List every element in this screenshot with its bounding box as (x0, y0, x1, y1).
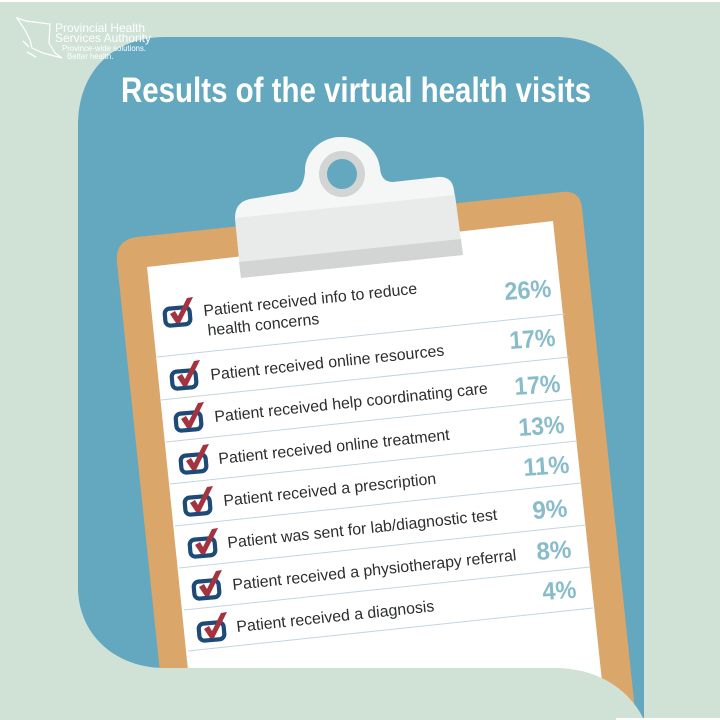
row dividers (157, 314, 593, 651)
row 1: info to reduce health concerns (164, 275, 552, 340)
row 8: diagnosis (198, 576, 577, 641)
label: Patient received a physiotherapy referral (232, 547, 517, 594)
label: Patient was sent for lab/diagnostic test (227, 507, 499, 552)
label: health concerns (207, 311, 320, 340)
value: 17% (508, 324, 556, 355)
value: 26% (503, 275, 552, 306)
icon: checkbox (171, 360, 200, 389)
label: Patient received a prescription (223, 471, 437, 510)
value: 13% (517, 411, 565, 442)
label: Patient received online resources (210, 343, 445, 384)
label: Patient received help coordinating care (214, 380, 489, 426)
logo: Provincial Health Services Authority: Better health. (67, 52, 113, 61)
icon: checkbox (193, 570, 222, 599)
value: 11% (522, 451, 570, 482)
icon: checkbox (189, 528, 218, 557)
logo: Provincial Health Services Authority: Provincial Health (55, 21, 145, 35)
row 6: lab/diagnostic test (189, 495, 568, 557)
icon: checkbox (175, 402, 204, 431)
value: 17% (513, 370, 561, 401)
bottom curved green overlay (0, 590, 644, 720)
blue rounded panel (78, 37, 644, 720)
icon: checkbox (198, 612, 227, 641)
logo: Provincial Health Services Authority (17, 18, 151, 61)
value: 8% (535, 536, 572, 566)
row 4: online treatment (180, 411, 565, 473)
paper sheet (147, 221, 604, 700)
value: 4% (541, 576, 577, 606)
icon: checkbox (164, 297, 193, 326)
label (203, 281, 420, 340)
row 3: help coordinating care (175, 370, 561, 431)
value: 9% (531, 495, 568, 525)
icon: checkbox (184, 486, 213, 515)
label: Patient received online treatment (218, 427, 451, 468)
clipboard clip (235, 137, 463, 278)
title: Results of the virtual health visits (121, 71, 591, 110)
row 5: prescription (184, 451, 570, 515)
logo: Provincial Health Services Authority: Province-wide solutions. (62, 44, 146, 53)
icon: checkbox (180, 444, 209, 473)
clipboard board (117, 192, 636, 720)
row 2: online resources (171, 324, 556, 389)
row 7: physiotherapy referral (193, 536, 572, 599)
label: Patient received info to reduce (203, 281, 418, 320)
label: Patient received a diagnosis (236, 598, 435, 636)
logo: Provincial Health Services Authority: Services Authority (55, 31, 151, 45)
